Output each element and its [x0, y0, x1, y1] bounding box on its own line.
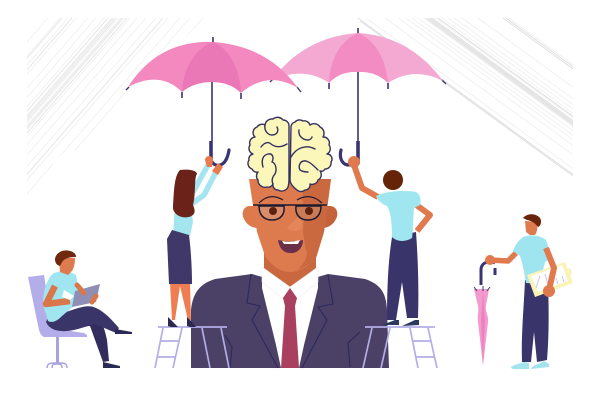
hands: [205, 156, 223, 175]
collar: [262, 267, 318, 299]
woman on ladder: [167, 156, 223, 327]
carrying arm: [546, 248, 554, 290]
face: [249, 179, 331, 272]
hair: [173, 170, 197, 217]
central man: [191, 179, 389, 368]
hair: [523, 214, 541, 227]
umbrella left: [126, 37, 301, 165]
mouth: [278, 240, 303, 253]
forearm: [77, 285, 96, 302]
illustration: [27, 18, 573, 369]
head: [383, 170, 403, 190]
raised arm: [354, 165, 378, 197]
shoes: [511, 361, 549, 369]
head: [525, 221, 537, 235]
closed umbrella: [474, 262, 495, 366]
hair: [55, 250, 76, 266]
laptop: [72, 284, 100, 307]
eyebrows: [259, 197, 322, 203]
shoes: [103, 329, 132, 368]
brain folds: [261, 125, 318, 184]
ears: [243, 206, 258, 228]
hand: [485, 255, 495, 265]
t-shirt: [43, 271, 78, 322]
top: [173, 202, 193, 236]
heels: [168, 317, 196, 327]
trousers: [387, 232, 418, 320]
far leg: [60, 312, 109, 362]
left lobe: [248, 117, 289, 191]
chair: [28, 275, 87, 368]
neck: [264, 250, 316, 288]
clipboard: [527, 262, 573, 297]
nose: [287, 214, 302, 231]
shoes: [382, 320, 419, 326]
shirt: [262, 268, 318, 368]
tie: [281, 288, 299, 368]
face shade: [297, 179, 331, 270]
legs: [170, 283, 191, 320]
rain streaks right: [358, 18, 573, 176]
man on ladder: [348, 156, 430, 326]
carrying hand: [543, 285, 555, 297]
paper: [62, 290, 74, 300]
t-shirt: [513, 235, 550, 284]
seated man: [28, 250, 132, 368]
brain: [248, 117, 332, 192]
arms: [190, 165, 216, 205]
arm: [46, 286, 70, 304]
skirt: [167, 230, 192, 284]
standing man with closed umbrella: [474, 214, 573, 369]
right lobe: [290, 120, 332, 192]
hand: [348, 156, 360, 168]
glasses: [253, 205, 327, 220]
near leg: [46, 306, 119, 333]
hip arm: [415, 204, 430, 231]
ladder right: [363, 327, 437, 368]
head: [59, 258, 75, 275]
teeth: [282, 240, 300, 244]
umbrella right: [270, 28, 446, 165]
ladder left: [155, 327, 229, 368]
trousers: [522, 280, 549, 362]
t-shirt: [376, 191, 421, 241]
rain streaks left: [27, 18, 203, 194]
suit: [191, 274, 389, 368]
lapels: [225, 274, 360, 368]
outstretched arm: [490, 253, 516, 261]
